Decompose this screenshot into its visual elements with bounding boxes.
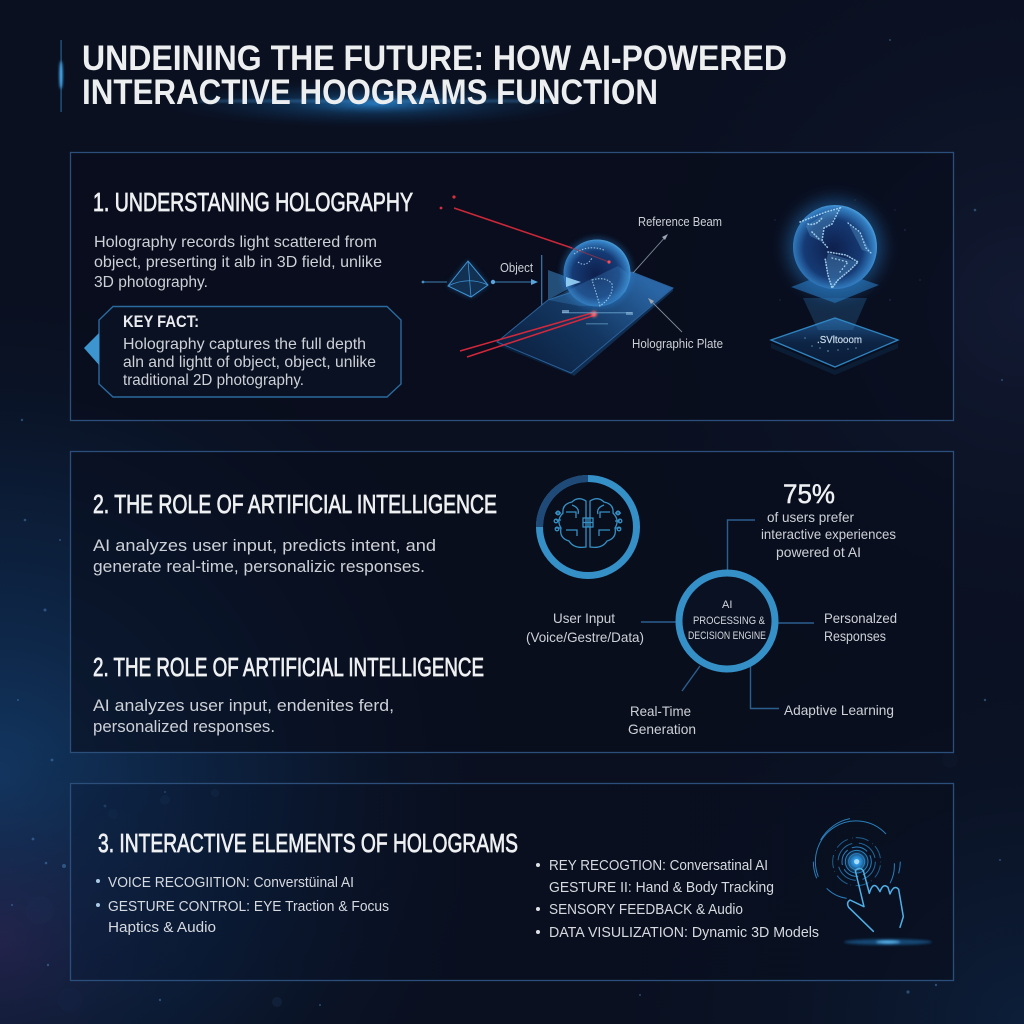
icon: brain in ring — [540, 478, 636, 576]
list: right features — [536, 857, 819, 941]
label: personalized responses: Responses — [824, 628, 886, 644]
icon: touch hand with rings — [813, 819, 903, 931]
list: left features: GESTURE CONTROL: EYE Traction & Focus — [108, 898, 389, 915]
globe — [548, 237, 633, 309]
label: tablet text: .SVltooom — [817, 334, 862, 346]
header accent bar — [59, 40, 63, 112]
diagram node: AI engine: AI — [722, 599, 732, 611]
red reference beam — [440, 195, 572, 248]
globe hologram — [787, 199, 883, 295]
heading: section 1: 1. UNDERSTANING HOLOGRAPHY — [93, 187, 413, 217]
panel: interactive elements — [70, 784, 954, 980]
label: reference beam: Reference Beam — [638, 215, 722, 229]
label: user input: User Input — [553, 610, 615, 626]
stat: 75 percent: powered ot AI — [776, 544, 861, 560]
callout: key fact: KEY FACT: — [123, 312, 199, 331]
list: right features: SENSORY FEEDBACK & Audio — [549, 901, 743, 918]
heading: section 3: 3. INTERACTIVE ELEMENTS OF HOLOGRAMS — [98, 828, 518, 858]
text block: AI description: generate real-time, personalizic responses. — [93, 557, 425, 576]
red object beams — [460, 310, 633, 357]
text block: holography description: object, preserting it alb in 3D field, unlike — [94, 254, 382, 271]
label: user input: (Voice/Gestre/Data) — [526, 629, 644, 645]
icon: object pyramid — [422, 261, 538, 297]
label: reference beam — [633, 215, 722, 273]
text block: holography description — [94, 234, 382, 291]
label: real-time generation — [628, 703, 696, 737]
text block: AI description: AI analyzes user input, predicts intent, and — [93, 536, 436, 555]
projection beam — [803, 298, 867, 330]
label: object: Object — [500, 261, 533, 275]
label: real-time generation: Real-Time — [630, 703, 691, 719]
label: real-time generation: Generation — [628, 721, 696, 737]
diagram node: AI engine — [679, 573, 775, 669]
text block: AI description — [93, 536, 436, 576]
list: right features: DATA VISULIZATION: Dynamic 3D Models — [549, 924, 819, 941]
label: personalized responses: Personalzed — [824, 610, 897, 626]
label: adaptive learning: Adaptive Learning — [784, 702, 894, 718]
label: holographic plate — [632, 298, 723, 351]
callout: key fact — [84, 306, 401, 397]
stat: 75 percent — [761, 479, 896, 560]
stat: 75 percent: interactive experiences — [761, 526, 896, 542]
title: INTERACTIVE HOOGRAMS FUNCTION — [82, 73, 658, 112]
heading: section 2: 2. THE ROLE OF ARTIFICIAL INTELLIGENCE — [93, 489, 497, 519]
callout: key fact: Holography captures the full depth — [123, 336, 366, 353]
diagram: holographic recording — [422, 195, 723, 376]
stat: 75 percent: 75% — [783, 479, 835, 509]
title: UNDEINING THE FUTURE: HOW AI-POWERED — [82, 39, 787, 78]
panel: understanding holography — [70, 152, 954, 420]
label: personalized responses — [824, 610, 897, 644]
holographic plate — [497, 272, 673, 376]
text block: holography description: Holography records light scattered from — [94, 234, 377, 251]
list: left features: Haptics & Audio — [108, 919, 216, 936]
text block: holography description: 3D photography. — [94, 274, 208, 291]
title — [82, 39, 787, 112]
text block: AI description repeated — [93, 696, 394, 736]
illustration: hologram globe projection — [771, 199, 898, 375]
list: right features: REY RECOGTION: Conversatinal AI — [549, 857, 768, 874]
title glow — [160, 80, 590, 128]
projector plane — [791, 270, 879, 303]
list: left features: VOICE RECOGIITION: Converstüinal AI — [108, 874, 354, 891]
label: user input — [526, 610, 644, 645]
diagram node: AI engine: PROCESSING & — [693, 615, 766, 627]
label: holographic plate: Holographic Plate — [632, 337, 723, 351]
diagram node: AI engine: DECISION ENGINE — [688, 630, 766, 642]
callout: key fact: traditional 2D photography. — [123, 372, 304, 389]
callout: key fact: aln and lightt of object, object, unlike — [123, 354, 376, 371]
tablet base — [771, 318, 898, 375]
list: left features — [96, 874, 389, 936]
list: right features: GESTURE II: Hand & Body Tracking — [549, 879, 774, 896]
light pedestal glow — [844, 939, 932, 945]
heading: section 2 repeated: 2. THE ROLE OF ARTIFICIAL INTELLIGENCE — [93, 652, 484, 682]
text block: AI description repeated: personalized responses. — [93, 717, 275, 736]
panel: role of artificial intelligence — [70, 452, 954, 752]
text block: AI description repeated: AI analyzes user input, endenites ferd, — [93, 696, 394, 715]
stat: 75 percent: of users prefer — [767, 509, 854, 525]
connector lines — [641, 520, 814, 708]
